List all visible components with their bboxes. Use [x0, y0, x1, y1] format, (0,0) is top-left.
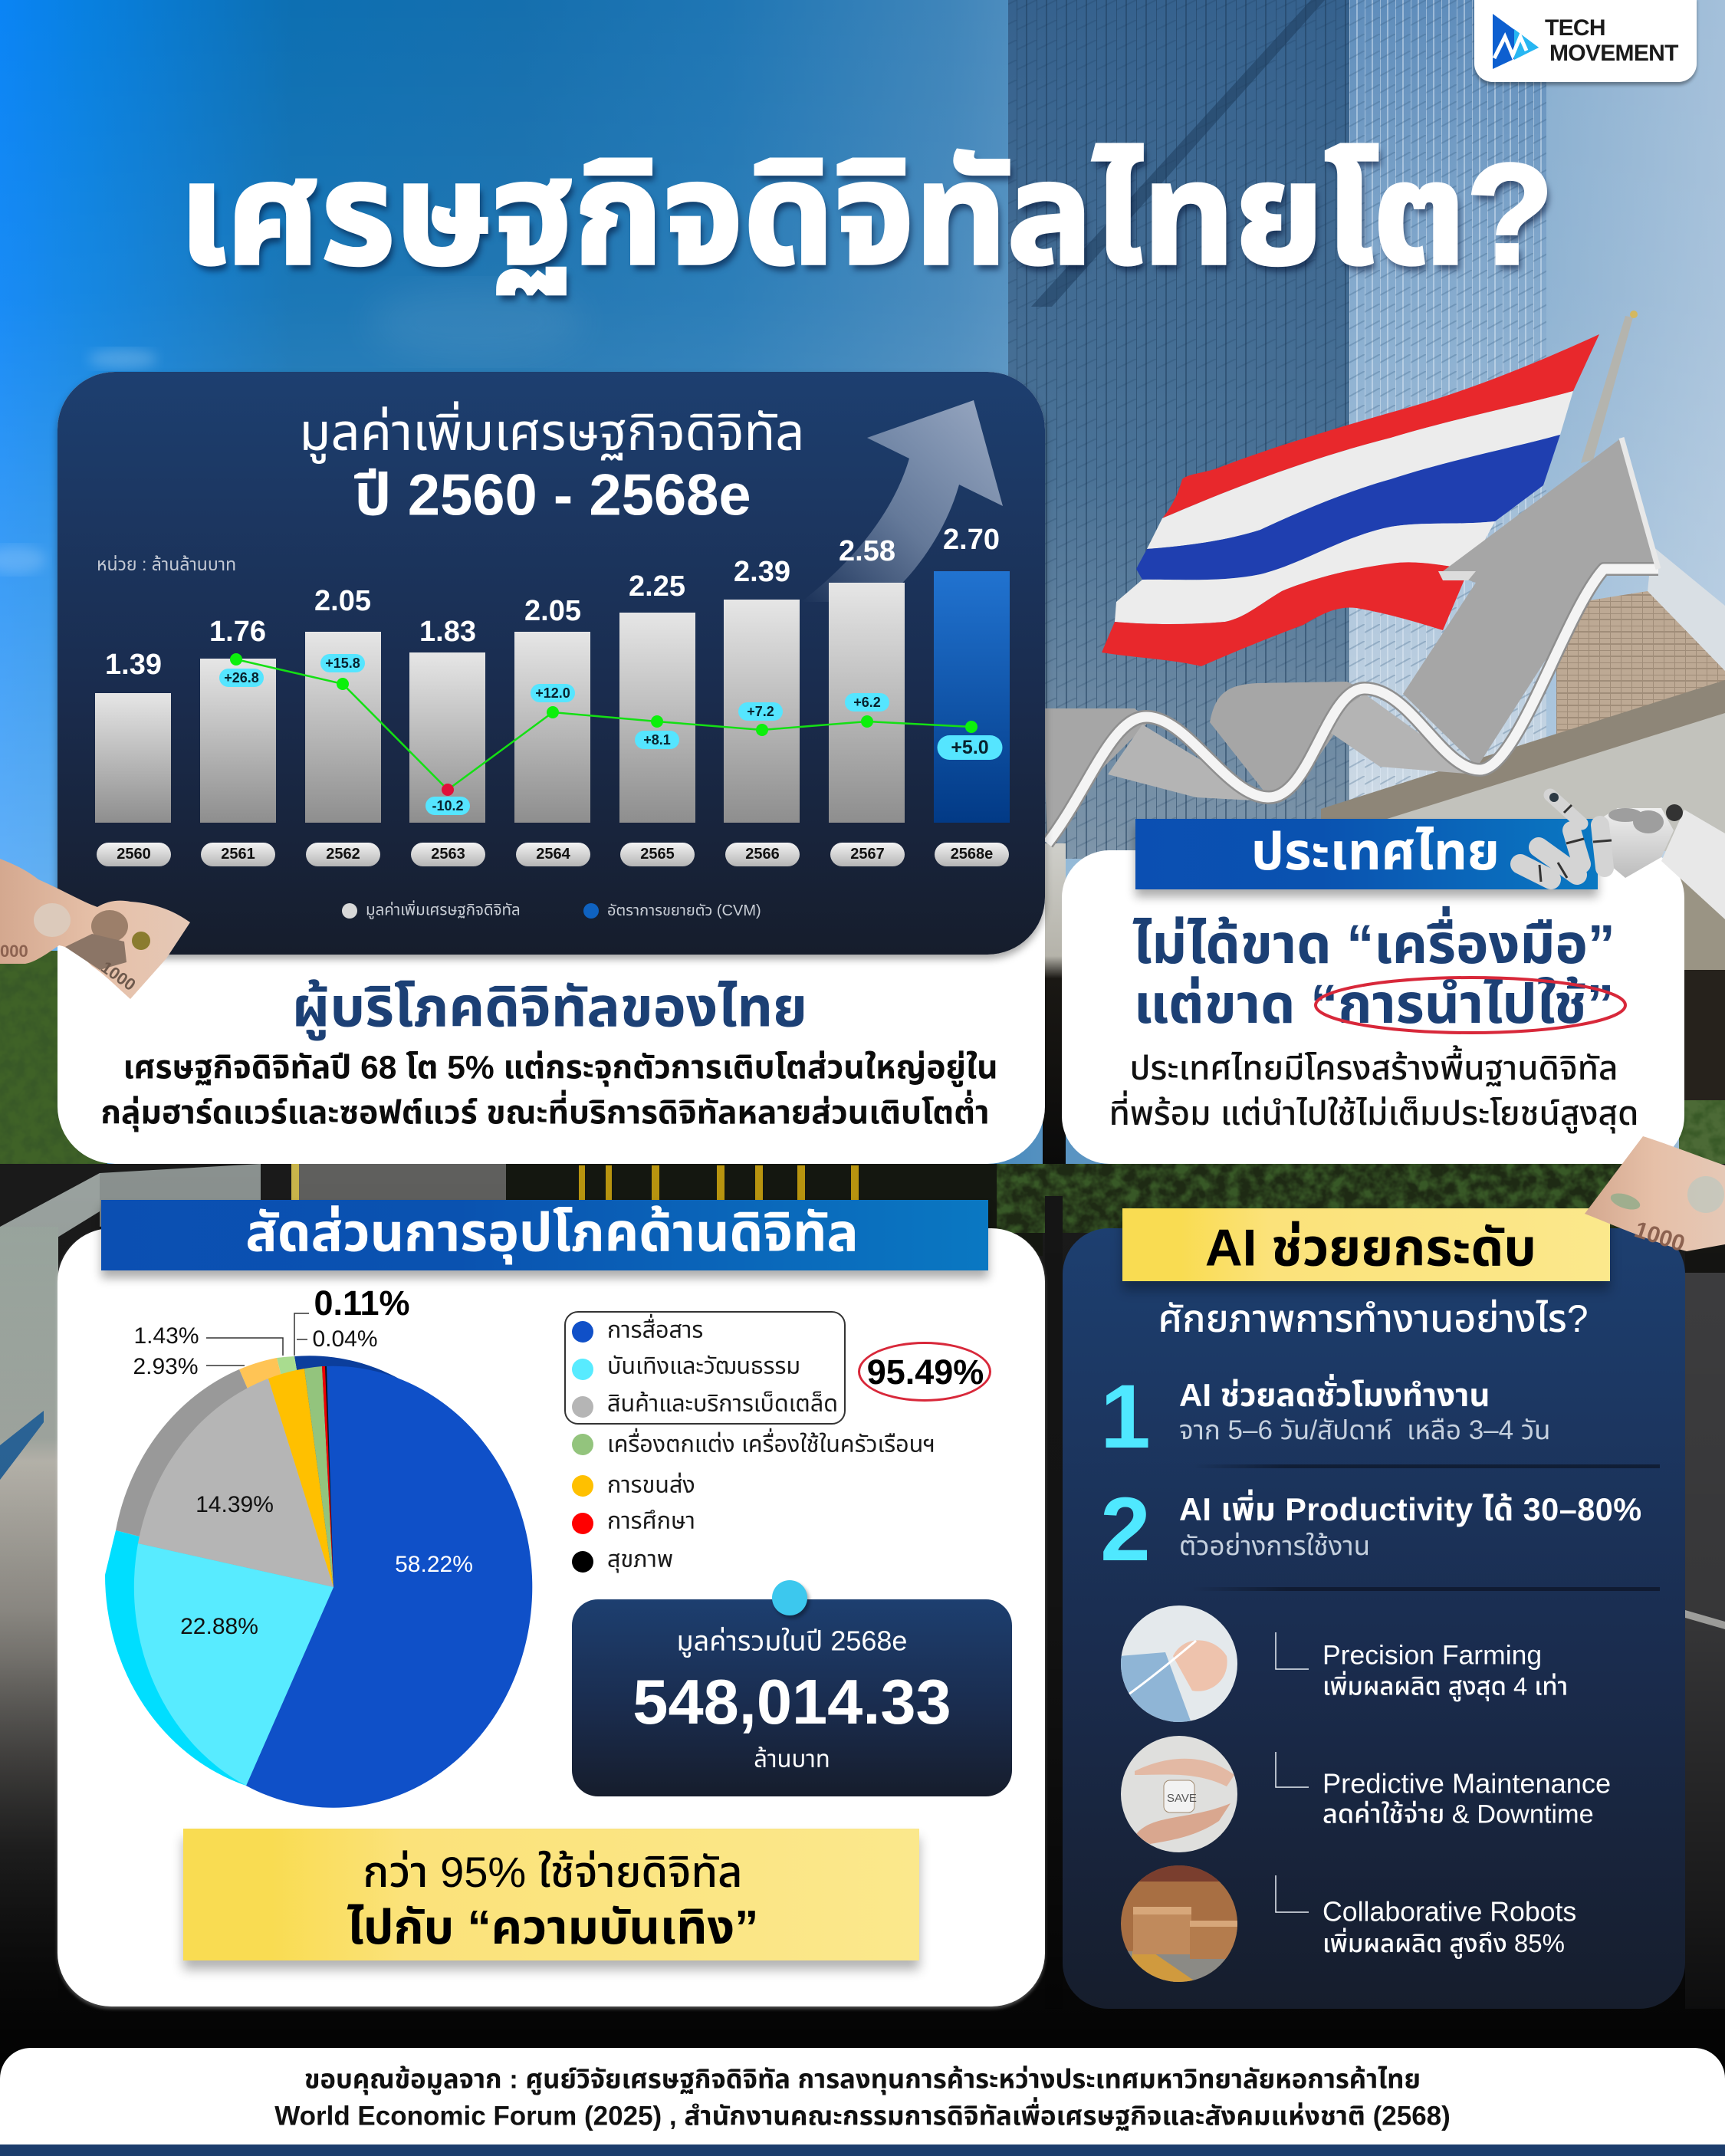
bar 2560	[95, 693, 171, 823]
pie legend: การสื่อสาร	[607, 1317, 703, 1343]
bar value labels: 2.58	[839, 535, 895, 567]
panel text: digital consumer heading: ผู้บริโภคดิจิทัลของไทย	[292, 977, 807, 1038]
point 1 detail: จาก 5–6 วัน/สัปดาห์ เหลือ 3–4 วัน	[1179, 1415, 1550, 1445]
growth rate labels: -10.2	[432, 798, 464, 813]
use case images and connectors	[1121, 1605, 1309, 1982]
unit note: หน่วย : ล้านล้านบาท	[97, 554, 236, 574]
ai heading text: AI ช่วยยกระดับ	[1205, 1219, 1536, 1277]
low building and bridge	[1043, 546, 1725, 1185]
growth rate labels: +8.1	[643, 732, 671, 748]
bar 2563	[409, 652, 485, 823]
banknote right: 1000	[1631, 1217, 1688, 1257]
logo wordmark: TECH	[1545, 15, 1605, 41]
year axis pills: 2563	[431, 846, 465, 863]
growth rate labels: +7.2	[747, 704, 774, 719]
year axis pills	[97, 843, 1009, 866]
point number 2: 2	[1100, 1479, 1151, 1580]
bar value labels	[105, 524, 1000, 681]
icon: pin dot	[772, 1580, 807, 1615]
pie slices	[134, 1366, 532, 1808]
text block: thailand explanation	[1109, 1045, 1638, 1133]
total caption: มูลค่ารวมในปี 2568e	[677, 1625, 907, 1656]
logo wordmark: MOVEMENT	[1549, 41, 1678, 66]
legend dot grey	[342, 903, 357, 919]
legend label blue: อัตราการขยายตัว (CVM)	[607, 902, 761, 919]
year axis pills: 2560	[117, 846, 151, 863]
point number 1: 1	[1100, 1366, 1151, 1467]
road scene	[0, 1164, 1725, 2156]
bar 2562	[305, 632, 381, 823]
ribbon title: สัดส่วนการอุปโภคด้านดิจิทัล	[245, 1204, 859, 1263]
bar 2565	[619, 613, 695, 823]
panel: bar chart card	[58, 372, 1045, 955]
credits text	[274, 2066, 1451, 2131]
pie labels: 2.93%	[133, 1354, 199, 1379]
bar value labels: 1.39	[105, 649, 162, 681]
icon: red hand-drawn ellipse	[1314, 976, 1627, 1034]
chart legend	[342, 900, 761, 919]
legend box outline	[564, 1311, 846, 1425]
legend label grey: มูลค่าเพิ่มเศรษฐกิจดิจิทัล	[366, 902, 521, 919]
footer bar	[0, 2144, 1725, 2156]
legend dot blue	[583, 903, 599, 919]
pie labels	[133, 1283, 473, 1639]
panel: total value	[572, 1599, 1012, 1796]
pie labels: 0.04%	[312, 1326, 378, 1352]
point 1 heading: AI ช่วยลดชั่วโมงทำงาน	[1179, 1377, 1490, 1413]
use case: collaborative robots	[1322, 1897, 1576, 1959]
use case: collaborative robots: Collaborative Robots	[1322, 1897, 1576, 1928]
icon: hands protecting savings jar: SAVE	[1167, 1792, 1197, 1805]
bar value labels: 2.39	[734, 556, 790, 588]
pie labels: 14.39%	[196, 1492, 274, 1517]
robot hand	[1510, 788, 1725, 919]
bar value labels: 2.05	[524, 595, 581, 627]
pie legend: เครื่องตกแต่ง เครื่องใช้ในครัวเรือนฯ	[607, 1431, 935, 1458]
banknote left	[0, 859, 190, 999]
thai flag	[1102, 311, 1638, 666]
bar 2564	[514, 632, 590, 823]
pie labels: 22.88%	[180, 1614, 258, 1639]
headline: not lacking tools: ไม่ได้ขาด “เครื่องมือ”	[1132, 914, 1615, 975]
bar value labels: 1.76	[209, 616, 266, 648]
bar 2567	[829, 583, 905, 823]
growth rate labels: +6.2	[853, 695, 881, 710]
banknote left: 1000	[97, 958, 140, 994]
ai subtitle: ศักยภาพการทำงานอย่างไร?	[1158, 1297, 1589, 1340]
icon: cardboard boxes on conveyor	[1119, 1863, 1242, 1986]
use case: precision farming: Precision Farming	[1322, 1640, 1542, 1671]
bar 2561	[200, 659, 276, 823]
year axis pills: 2566	[745, 846, 780, 863]
panel: ai productivity	[1063, 1228, 1685, 2009]
total unit: ล้านบาท	[754, 1745, 830, 1772]
pie legend: สินค้าและบริการเบ็ดเตล็ด	[607, 1391, 838, 1417]
growth rate labels: +12.0	[535, 685, 570, 701]
bar value labels: 2.70	[943, 524, 1000, 556]
text block: thailand explanation: ประเทศไทยมีโครงสร้างพื้นฐานดิจิทัล	[1130, 1050, 1618, 1087]
pie legend: การศึกษา	[607, 1508, 695, 1534]
use case: collaborative robots: เพิ่มผลผลิต สูงถึง 85%	[1322, 1929, 1565, 1957]
growth rate labels: +26.8	[224, 670, 259, 685]
use case: precision farming	[1322, 1640, 1568, 1702]
pie legend: การขนส่ง	[607, 1472, 695, 1498]
pie legend: สุขภาพ	[607, 1546, 673, 1573]
year axis pills: 2561	[221, 846, 255, 863]
note: ai heading	[1122, 1208, 1610, 1281]
growth rate labels	[219, 654, 1003, 815]
pie leader lines	[206, 1313, 309, 1366]
use case: precision farming: เพิ่มผลผลิต สูงสุด 4 เท่า	[1322, 1671, 1568, 1700]
title: เศรษฐกิจดิจิทัลไทยโต?	[179, 134, 1554, 294]
use case: predictive maintenance: ลดค่าใช้จ่าย & Downtime	[1322, 1799, 1594, 1829]
ribbon: consumption share	[101, 1200, 988, 1270]
logo badge	[1474, 0, 1697, 82]
tree line left	[0, 951, 107, 1196]
grey growth arrow	[1043, 438, 1658, 843]
point 2 detail: ตัวอย่างการใช้งาน	[1179, 1531, 1370, 1561]
icon: hands protecting savings jar	[1119, 1733, 1242, 1855]
callout value: 95.49%	[867, 1352, 984, 1392]
text block: consumer explanation	[101, 1050, 998, 1132]
note text: ไปกับ “ความบันเทิง”	[347, 1901, 758, 1954]
footer credits	[0, 2048, 1725, 2144]
bar value labels: 2.05	[314, 585, 371, 617]
panel: thailand card	[1062, 850, 1684, 1164]
text block: consumer explanation: กลุ่มฮาร์ดแวร์และซอฟต์แวร์ ขณะที่บริการดิจิทัลหลายส่วนเติบโตต่ำ	[101, 1095, 989, 1132]
sky	[0, 0, 1725, 1181]
banknote left: 000	[0, 942, 28, 961]
bar value labels: 1.83	[419, 616, 476, 648]
headline: not lacking tools: แต่ขาด “การนำไปใช้”	[1134, 974, 1614, 1035]
pie labels: 0.11%	[314, 1283, 410, 1323]
pie labels: 1.43%	[133, 1323, 199, 1349]
growth rate labels: +15.8	[325, 656, 360, 671]
pie back edge	[105, 1356, 414, 1786]
year axis pills: 2568e	[951, 846, 993, 863]
headline: not lacking tools	[1132, 906, 1615, 1035]
point 2	[1100, 1479, 1642, 1580]
text block: consumer explanation: เศรษฐกิจดิจิทัลปี 68 โต 5% แต่กระจุกตัวการเติบโตส่วนใหญ่อยู่ใน	[123, 1050, 998, 1086]
connector lines	[1276, 1632, 1309, 1912]
panel: digital consumption share	[58, 1228, 1045, 2006]
note text	[347, 1848, 758, 1954]
icon: tech movement mark	[1493, 14, 1539, 69]
pie chart	[105, 1313, 532, 1808]
pie legend: บันเทิงและวัฒนธรรม	[607, 1353, 800, 1379]
use case: predictive maintenance	[1322, 1767, 1611, 1829]
use case: predictive maintenance: Predictive Maintenance	[1322, 1767, 1611, 1799]
credits text: ขอบคุณข้อมูลจาก : ศูนย์วิจัยเศรษฐกิจดิจิทัล การลงทุนการค้าระหว่างประเทศมหาวิทยาลัยหอการค้าไทย	[304, 2066, 1421, 2095]
pie legend	[572, 1314, 935, 1573]
bar chart	[95, 571, 1010, 823]
point 2 heading: AI เพิ่ม Productivity ได้ 30–80%	[1179, 1491, 1642, 1527]
logo wordmark	[1545, 15, 1679, 66]
bar 2568e	[934, 571, 1010, 823]
panel: value added and consumers	[58, 372, 1045, 1164]
credits text: World Economic Forum (2025) , สำนักงานคณะกรรมการดิจิทัลเพื่อเศรษฐกิจและสังคมแห่งชาติ (2568)	[274, 2101, 1451, 2131]
note text: กว่า 95% ใช้จ่ายดิจิทัล	[363, 1848, 743, 1896]
chart title: มูลค่าเพิ่มเศรษฐกิจดิจิทัล	[299, 404, 805, 462]
note: entertainment spending	[183, 1829, 919, 1960]
bar value labels: 2.25	[629, 570, 685, 603]
office tower	[1008, 0, 1546, 859]
growth rate line	[230, 653, 978, 796]
chart subtitle: ปี 2560 - 2568e	[354, 462, 751, 527]
ribbon title: ประเทศไทย	[1251, 823, 1500, 881]
icon: hand with light	[1119, 1602, 1242, 1725]
growth rate labels: +5.0	[951, 737, 989, 758]
ribbon: thailand	[1135, 819, 1598, 889]
total number: 548,014.33	[632, 1666, 951, 1737]
callout: 95.49 percent	[858, 1342, 991, 1402]
bar 2566	[724, 600, 800, 823]
year axis pills: 2567	[850, 846, 885, 863]
year axis pills: 2564	[536, 846, 570, 863]
pie labels: 58.22%	[395, 1552, 473, 1577]
point 1	[1100, 1366, 1550, 1467]
banknote right	[1585, 1136, 1725, 1257]
text block: thailand explanation: ที่พร้อม แต่นำไปใช้ไม่เต็มประโยชน์สูงสุด	[1109, 1095, 1638, 1132]
year axis pills: 2565	[640, 846, 675, 863]
year axis pills: 2562	[326, 846, 360, 863]
